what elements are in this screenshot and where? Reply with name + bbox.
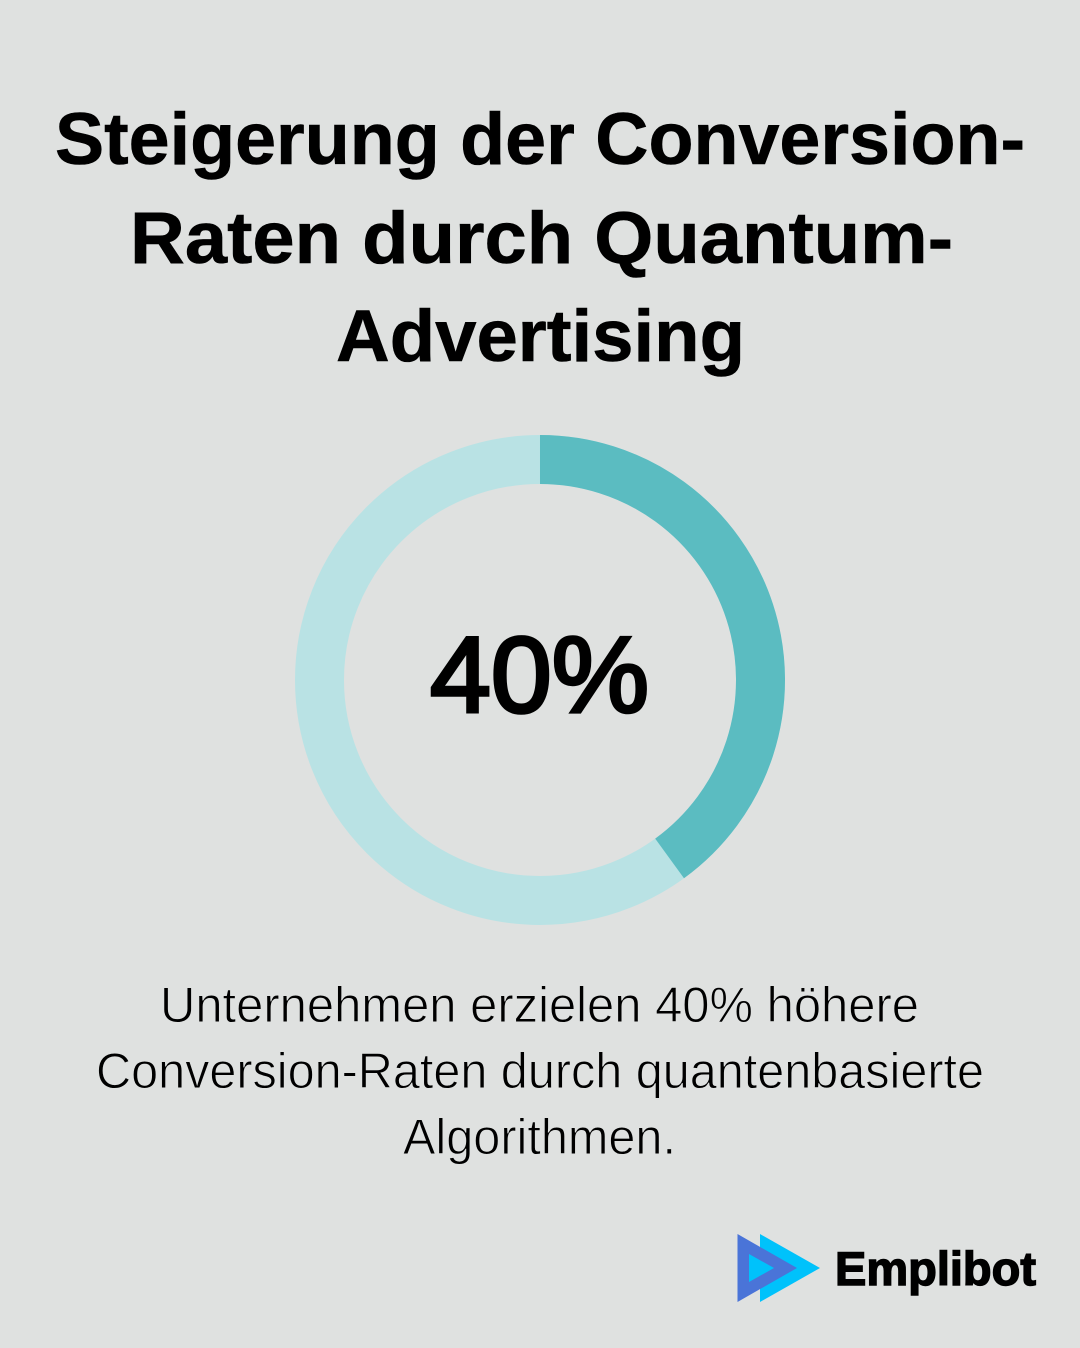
description text: Conversion-Raten durch quantenbasierte bbox=[96, 1043, 984, 1099]
big number: 40% bbox=[430, 614, 649, 735]
description text: Algorithmen. bbox=[403, 1109, 676, 1165]
title: Steigerung der Conversion- bbox=[55, 99, 1025, 180]
title: Advertising bbox=[336, 296, 745, 377]
ring value arc bbox=[540, 460, 761, 858]
title: Raten durch Quantum- bbox=[130, 198, 953, 279]
icon: play triangles bbox=[738, 1234, 820, 1302]
description text: Unternehmen erzielen 40% höhere bbox=[160, 977, 919, 1033]
ring track bbox=[320, 460, 760, 900]
description text bbox=[96, 977, 984, 1165]
title bbox=[55, 99, 1025, 377]
logo: Emplibot bbox=[738, 1234, 1036, 1302]
brand name: Emplibot bbox=[835, 1242, 1036, 1295]
donut chart: 40% bbox=[320, 460, 761, 900]
